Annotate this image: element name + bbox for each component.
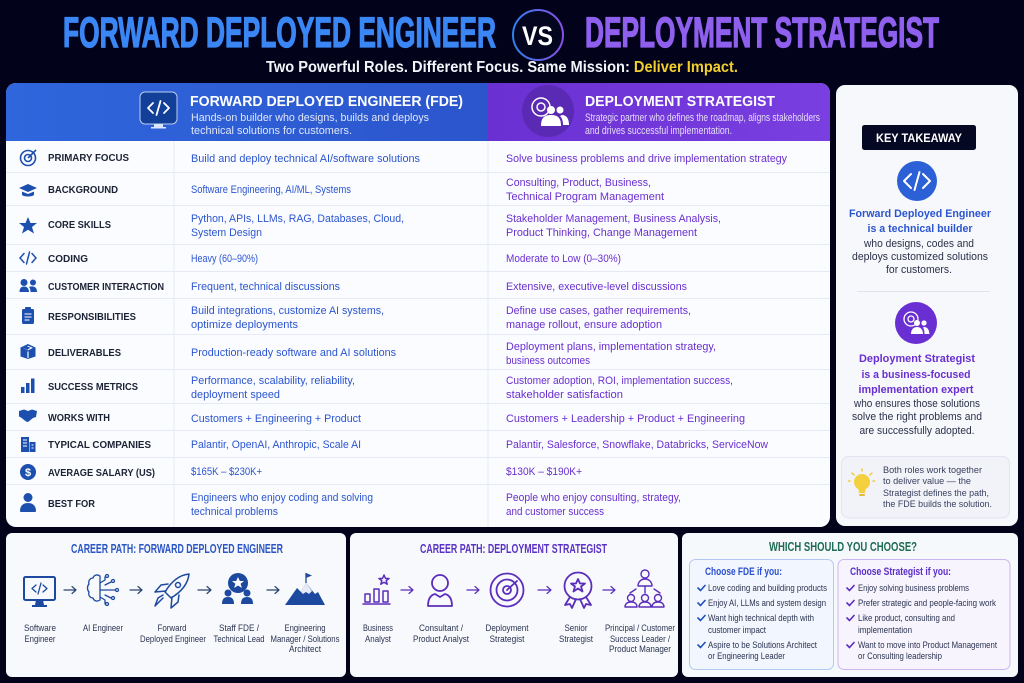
heading: career path fde: CAREER PATH: FORWARD DEPLOYED ENGINEER xyxy=(71,541,283,556)
text: strategist takeaway: are successfully adopted. xyxy=(860,425,974,437)
icon: mountain flag xyxy=(285,573,325,605)
step: business analyst xyxy=(363,575,393,644)
row: best for: and customer success xyxy=(506,506,605,518)
row: responsibilities: Define use cases, gather requirements, xyxy=(506,305,691,317)
title: forward deployed engineer: FORWARD DEPLOYED ENGINEER xyxy=(63,9,496,57)
step: business analyst: Analyst xyxy=(365,634,391,644)
row: success metrics: deployment speed xyxy=(191,389,280,401)
step: deployment strategist xyxy=(486,574,529,644)
icon: people xyxy=(20,279,37,292)
row: deliverables: Deployment plans, implementation strategy, xyxy=(506,341,716,353)
row: responsibilities: optimize deployments xyxy=(191,319,299,331)
heading: career path strategist: CAREER PATH: DEPLOYMENT STRATEGIST xyxy=(420,541,607,556)
header: deployment strategist xyxy=(488,83,830,141)
text: strategist takeaway: who ensures those solutions xyxy=(853,398,981,410)
step: engineering manager: Manager / Solutions xyxy=(270,634,340,644)
row: deliverables xyxy=(20,341,716,367)
row: success metrics: Customer adoption, ROI, implementation success, xyxy=(506,375,733,387)
row: average salary: $130K – $190K+ xyxy=(506,466,582,478)
card: choose fde: or Engineering Leader xyxy=(708,651,785,661)
row: coding xyxy=(20,252,621,265)
header: deployment strategist: Strategic partner who defines the roadmap, aligns stakeholders xyxy=(585,112,820,124)
text: strategist takeaway: is a business-focused xyxy=(862,369,970,381)
row: typical companies: Palantir, Salesforce, Snowflake, Databricks, ServiceNow xyxy=(506,439,768,451)
row: customer interaction: Frequent, technical discussions xyxy=(191,281,341,293)
row: primary focus: Solve business problems and drive implementation strategy xyxy=(506,153,788,165)
step: software engineer: Software xyxy=(24,623,56,633)
callout: both roles: the FDE builds the solution. xyxy=(883,499,992,510)
card: choose strategist: Want to move into Product Management xyxy=(858,640,997,650)
step: senior strategist: Strategist xyxy=(559,634,593,644)
checks xyxy=(698,586,705,648)
header: forward deployed engineer: technical solutions for customers. xyxy=(191,125,352,137)
row: deliverables: DELIVERABLES xyxy=(48,347,121,359)
row: core skills: Stakeholder Management, Business Analysis, xyxy=(506,213,721,225)
arrow xyxy=(267,586,279,594)
row: best for: technical problems xyxy=(191,506,279,518)
step: consultant: Consultant / xyxy=(419,623,464,633)
card: choose fde: Want high technical depth with xyxy=(708,613,814,623)
arrow xyxy=(467,586,479,594)
row: background: BACKGROUND xyxy=(48,184,118,196)
text: fde takeaway: for customers. xyxy=(886,264,952,276)
header: deployment strategist: and drives successful implementation. xyxy=(585,125,732,137)
card: choose strategist: Enjoy solving business problems xyxy=(858,583,969,593)
row: works with xyxy=(19,410,745,425)
row: background: Software Engineering, AI/ML, Systems xyxy=(191,184,352,196)
step: ai engineer: AI Engineer xyxy=(83,623,123,633)
step: senior strategist: Senior xyxy=(564,623,588,633)
card: choose fde: Love coding and building products xyxy=(708,583,827,593)
arrow xyxy=(198,586,211,594)
step: engineering manager xyxy=(270,573,340,654)
step: deployment strategist: Deployment xyxy=(486,623,529,633)
row: core skills: Product Thinking, Change Management xyxy=(506,227,697,239)
step: engineering manager: Architect xyxy=(289,644,322,654)
icon: bar chart xyxy=(21,378,34,393)
step: deployment strategist: Strategist xyxy=(490,634,525,644)
card: choose strategist: Like product, consulting and xyxy=(858,613,955,623)
step: principal: Product Manager xyxy=(609,644,671,654)
row: background: Technical Program Management xyxy=(506,191,664,203)
card: choose strategist: Prefer strategic and people-facing work xyxy=(858,598,996,608)
subtitle: Two Powerful Roles. Different Focus. Same Mission: Deliver Impact. xyxy=(266,59,738,76)
row: responsibilities: manage rollout, ensure adoption xyxy=(506,319,662,331)
step: principal: Success Leader / xyxy=(610,634,670,644)
row: coding: Heavy (60–90%) xyxy=(191,253,258,265)
text: fde takeaway: Forward Deployed Engineer xyxy=(849,208,992,220)
vs badge xyxy=(513,10,563,60)
header: forward deployed engineer: Hands-on builder who designs, builds and deploys xyxy=(191,112,429,124)
card: choose strategist xyxy=(838,560,1010,670)
icon: code circle xyxy=(897,161,937,201)
row: best for xyxy=(20,492,681,518)
arrow xyxy=(401,586,413,594)
icon: handshake xyxy=(19,410,37,422)
callout: both roles: Both roles work together xyxy=(883,465,982,476)
row: success metrics: SUCCESS METRICS xyxy=(48,381,138,393)
card: choose strategist: or Consulting leadership xyxy=(858,651,942,661)
icon: medal xyxy=(564,572,592,608)
row: core skills: CORE SKILLS xyxy=(48,219,111,231)
row: best for: People who enjoy consulting, strategy, xyxy=(506,492,681,504)
row: average salary: AVERAGE SALARY (US) xyxy=(48,467,155,479)
badge: key takeaway xyxy=(862,125,976,150)
icon: brain circuit xyxy=(88,574,118,606)
icon: bars star xyxy=(363,575,390,604)
row: success metrics: stakeholder satisfaction xyxy=(506,389,623,401)
icon: star xyxy=(19,217,37,234)
callout: both roles xyxy=(842,456,1010,518)
row: best for: BEST FOR xyxy=(48,498,95,510)
row: success metrics xyxy=(21,375,733,401)
icon: bullseye xyxy=(490,574,524,606)
header: forward deployed engineer: FORWARD DEPLOYED ENGINEER (FDE) xyxy=(190,94,463,110)
icon: dollar coin xyxy=(20,464,36,480)
step: consultant: Product Analyst xyxy=(413,634,470,644)
panel: key takeaway xyxy=(836,85,1018,526)
row: responsibilities: RESPONSIBILITIES xyxy=(48,311,136,323)
icon: person xyxy=(20,493,36,512)
step: engineering manager: Engineering xyxy=(284,623,326,633)
icon: monitor xyxy=(24,577,55,607)
card: choose fde: Choose FDE if you: xyxy=(705,566,782,578)
icon: org chart xyxy=(625,570,664,607)
text: strategist takeaway: solve the right problems and xyxy=(852,411,982,423)
row: coding: Moderate to Low (0–30%) xyxy=(506,253,621,265)
vs badge: VS xyxy=(522,21,553,51)
text: strategist takeaway: Deployment Strategist xyxy=(859,353,975,365)
arrow xyxy=(130,586,142,594)
row: responsibilities xyxy=(22,305,691,331)
callout: both roles: to deliver value — the xyxy=(883,476,971,487)
row: typical companies xyxy=(21,437,768,452)
card: choose strategist: Choose Strategist if you: xyxy=(850,566,951,578)
icon: graduation cap xyxy=(19,184,37,196)
step: principal: Principal / Customer xyxy=(605,623,675,633)
step: business analyst: Business xyxy=(363,623,393,633)
arrow xyxy=(538,586,551,594)
row: responsibilities: Build integrations, customize AI systems, xyxy=(191,305,384,317)
row: primary focus xyxy=(20,150,788,166)
icon: light bulb xyxy=(848,469,874,495)
title xyxy=(63,9,939,60)
badge: key takeaway: KEY TAKEAWAY xyxy=(876,131,962,145)
row: best for: Engineers who enjoy coding and solving xyxy=(191,492,373,504)
row: primary focus: Build and deploy technical AI/software solutions xyxy=(191,153,421,165)
text: strategist takeaway: implementation expert xyxy=(858,384,974,396)
step: forward deployed engineer: Deployed Engineer xyxy=(140,634,206,644)
heading: which should you choose: WHICH SHOULD YOU CHOOSE? xyxy=(769,540,917,554)
row: typical companies: Palantir, OpenAI, Anthropic, Scale AI xyxy=(191,439,361,451)
text: fde takeaway: deploys customized solutions xyxy=(852,251,989,263)
text: fde takeaway: is a technical builder xyxy=(868,223,973,235)
icon: target xyxy=(20,150,36,166)
icon: box xyxy=(20,344,36,359)
text: fde takeaway: who designs, codes and xyxy=(863,238,974,250)
card: choose fde: customer impact xyxy=(708,625,766,635)
text: strategist takeaway xyxy=(852,353,982,437)
step: software engineer xyxy=(24,577,56,644)
row: customer interaction: Extensive, executive-level discussions xyxy=(506,281,688,293)
card: choose strategist: implementation xyxy=(858,625,912,635)
icon: team star xyxy=(222,573,253,604)
icon: buildings xyxy=(21,437,36,452)
row: deliverables: Production-ready software and AI solutions xyxy=(191,347,397,359)
icon: strategist target and people xyxy=(522,85,574,137)
step: forward deployed engineer xyxy=(140,574,206,644)
text: fde takeaway xyxy=(849,208,992,276)
row: works with: Customers + Leadership + Product + Engineering xyxy=(506,413,745,425)
row: coding: CODING xyxy=(48,253,88,265)
icon: dollar coin: $ xyxy=(25,467,31,479)
row: works with: WORKS WITH xyxy=(48,412,110,424)
arrow xyxy=(603,586,615,594)
header: deployment strategist: DEPLOYMENT STRATEGIST xyxy=(585,94,775,110)
icon: strategist circle xyxy=(895,302,937,344)
icon: code brackets xyxy=(20,252,36,264)
panel: career path fde xyxy=(6,533,346,677)
icon: code monitor xyxy=(140,92,177,128)
row: background: Consulting, Product, Business, xyxy=(506,177,651,189)
row: works with: Customers + Engineering + Product xyxy=(191,413,361,425)
checks xyxy=(847,586,854,648)
row: customer interaction: CUSTOMER INTERACTION xyxy=(48,281,164,293)
panel: career path strategist xyxy=(350,533,678,677)
row: core skills: System Design xyxy=(191,227,262,239)
row: primary focus: PRIMARY FOCUS xyxy=(48,152,129,164)
step: staff fde xyxy=(214,573,265,644)
step: staff fde: Technical Lead xyxy=(214,634,265,644)
callout: both roles: Strategist defines the path, xyxy=(883,488,989,499)
step: forward deployed engineer: Forward xyxy=(158,623,187,633)
panel: which should you choose xyxy=(682,533,1018,677)
row: background xyxy=(19,177,664,203)
icon: clipboard xyxy=(22,307,34,324)
row: average salary xyxy=(20,464,582,480)
row: core skills xyxy=(19,213,721,239)
step: ai engineer xyxy=(83,574,123,633)
step: senior strategist xyxy=(559,572,593,644)
step: staff fde: Staff FDE / xyxy=(219,623,260,633)
row: customer interaction xyxy=(20,279,688,293)
header: forward deployed engineer xyxy=(6,83,488,141)
row: typical companies: TYPICAL COMPANIES xyxy=(48,439,151,451)
card: choose fde xyxy=(690,560,834,670)
row: deliverables: business outcomes xyxy=(506,355,591,367)
panel: comparison table xyxy=(6,83,830,527)
row: success metrics: Performance, scalability, reliability, xyxy=(191,375,355,387)
row: core skills: Python, APIs, LLMs, RAG, Databases, Cloud, xyxy=(191,213,404,225)
card: choose fde: Enjoy AI, LLMs and system design xyxy=(708,598,826,608)
card: choose fde: Aspire to be Solutions Architect xyxy=(708,640,817,650)
step: software engineer: Engineer xyxy=(24,634,56,644)
row: average salary: $165K – $230K+ xyxy=(191,466,262,478)
icon: rocket xyxy=(155,574,189,608)
step: principal xyxy=(605,570,675,654)
step: consultant xyxy=(413,575,470,644)
icon: person outline xyxy=(428,575,452,606)
arrow xyxy=(64,586,76,594)
